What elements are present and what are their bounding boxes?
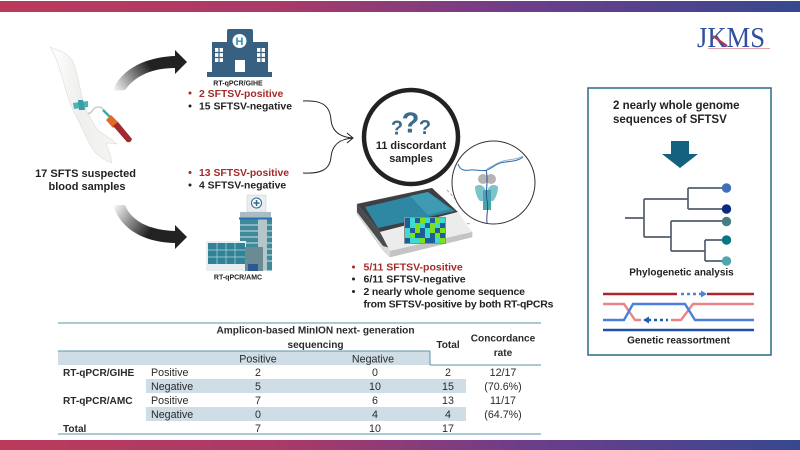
results table: (64.7%): [484, 409, 522, 421]
result list: AMC: 4 SFTSV-negative: [199, 180, 286, 192]
result list: GIHE: 2 SFTSV-positive: [199, 89, 284, 100]
results table: Negative: [352, 354, 394, 366]
results table: Positive: [151, 395, 188, 407]
result list: GIHE: 15 SFTSV-negative: [199, 102, 292, 112]
tourniquet: [73, 101, 88, 109]
flow cell grid: [404, 217, 446, 244]
arrow: arm to GIHE: [113, 50, 187, 91]
results table: 2: [255, 367, 261, 379]
label: phylogenetic analysis: Phylogenetic analysis: [629, 268, 734, 278]
results table: 15: [442, 381, 454, 393]
results table: 11/17: [490, 395, 516, 407]
results table: Total: [436, 340, 460, 351]
icon: question marks: [391, 108, 431, 140]
heading: whole genome sequences: [613, 100, 740, 126]
result list: GIHE: [188, 89, 292, 112]
arrow: down: [662, 141, 698, 168]
tube: [88, 107, 105, 113]
results table: 7: [255, 423, 261, 435]
results table: 2: [445, 367, 451, 379]
discordant samples circle: [364, 90, 458, 184]
phylogenetic tree: [625, 183, 731, 266]
genetic reassortment diagram: [603, 290, 754, 330]
label: discordant samples: [376, 140, 446, 165]
results table: 0: [255, 409, 261, 421]
results table: rate: [494, 348, 513, 359]
results table: Concordance: [471, 334, 536, 344]
results table: Positive: [239, 354, 277, 366]
label: RT-qPCR/GIHE: RT-qPCR/GIHE: [213, 80, 263, 88]
icon: question marks: ?: [402, 108, 419, 140]
label: 17 samples: blood samples: [48, 181, 126, 193]
result list: AMC: [188, 168, 289, 192]
arrow: arm to AMC: [113, 205, 187, 249]
results table: 12/17: [490, 367, 516, 379]
panel: genome sequence analysis: [588, 88, 771, 355]
results table: 10: [369, 381, 381, 393]
icon: hospital GIHE: [207, 29, 272, 77]
brace connector: [303, 101, 353, 173]
icon: hospital AMC: [206, 195, 272, 271]
top gradient bar: [0, 1, 800, 12]
label: genetic reassortment: Genetic reassortment: [627, 336, 731, 346]
heading: whole genome sequences: sequences of SFTSV: [613, 114, 727, 126]
label: 17 samples: [35, 168, 136, 193]
icon: question marks: ?: [391, 118, 403, 140]
label: discordant samples: 11 discordant: [376, 140, 446, 152]
icon: nanopore zoom detail: [447, 141, 535, 224]
icon: MinION sequencer: [357, 188, 472, 257]
results table: 4: [445, 409, 451, 421]
results table: Amplicon-based MinION next- generation: [217, 326, 414, 336]
results table: 10: [369, 423, 381, 435]
heading: whole genome sequences: 2 nearly whole genome: [613, 100, 740, 112]
icon: arm with blood draw: [50, 47, 132, 163]
results table: sequencing: [287, 340, 344, 351]
results table: 4: [372, 409, 378, 421]
result list: MinION: from SFTSV-positive by both RT-qPCRs: [364, 298, 554, 310]
icon: hospital GIHE: H: [236, 36, 244, 48]
label: RT-qPCR/AMC: RT-qPCR/AMC: [214, 274, 262, 282]
JKMS logo: JKMS: [697, 23, 765, 54]
results table: 0: [372, 367, 378, 379]
results table: 17: [442, 423, 454, 435]
results table: [58, 323, 541, 435]
results table: Negative: [151, 381, 193, 393]
result list: MinION: [352, 262, 554, 310]
results table: Positive: [151, 367, 188, 379]
icon: question marks: ?: [419, 117, 431, 139]
blood tube: [106, 115, 118, 128]
results table: Total: [63, 424, 87, 435]
results table: (70.6%): [484, 381, 522, 393]
label: discordant samples: samples: [389, 153, 433, 165]
results table: 7: [255, 395, 261, 407]
results table: 6: [372, 395, 378, 407]
result list: MinION: 6/11 SFTSV-negative: [364, 274, 466, 286]
results table: RT-qPCR/GIHE: [63, 368, 134, 379]
results table: 5: [255, 381, 261, 393]
bottom gradient bar: [0, 440, 800, 450]
result list: MinION: 5/11 SFTSV-positive: [364, 262, 463, 274]
results table: RT-qPCR/AMC: [63, 396, 133, 407]
result list: AMC: 13 SFTSV-positive: [199, 168, 289, 179]
label: 17 samples: 17 SFTS suspected: [35, 168, 136, 180]
result list: MinION: 2 nearly whole genome sequence: [364, 286, 525, 298]
results table: 13: [442, 395, 454, 407]
results table: Negative: [151, 409, 193, 421]
